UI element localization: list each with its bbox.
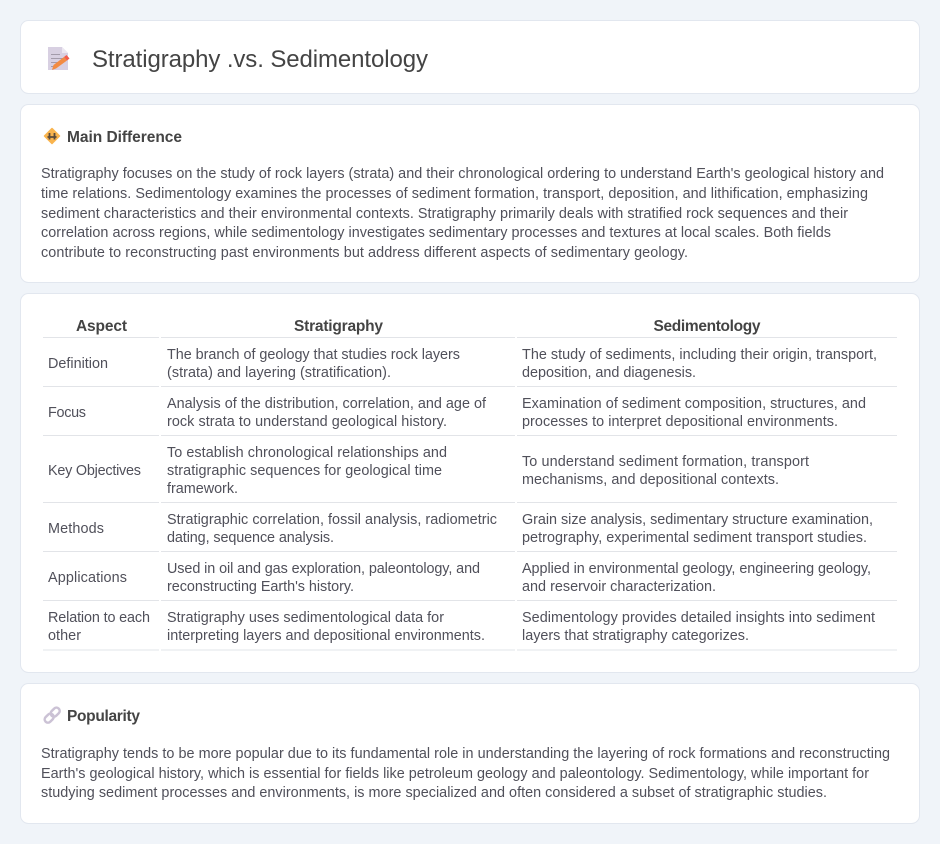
text block: main difference paragraph: Stratigraphy focuses on the study of rock layers (strata) and their chronological ordering to understand Earth's geological history and: [41, 166, 884, 182]
table row: applications: Applications: [48, 570, 127, 586]
icon: link: [43, 706, 61, 724]
table row: key objectives: mechanisms, and depositional contexts.: [522, 472, 779, 488]
table row: focus: Focus: [48, 405, 86, 421]
table row: applications: Used in oil and gas exploration, paleontology, and: [167, 561, 480, 577]
table header row: Stratigraphy: [294, 318, 383, 335]
table row: definition: The branch of geology that studies rock layers: [167, 347, 460, 363]
table row: methods: Methods: [48, 521, 104, 537]
text block: popularity paragraph: Earth's geological history, which is essential for fields like petroleum geology and paleontology. Sedimentology, while important for: [41, 766, 869, 782]
table row: key objectives: Key Objectives: [48, 463, 141, 479]
table row: methods: Stratigraphic correlation, fossil analysis, radiometric: [167, 512, 497, 528]
table row: focus: rock strata to understand geological history.: [167, 414, 447, 430]
panel: popularity: [20, 684, 920, 824]
table row: relation to each other: Sedimentology provides detailed insights into sediment: [522, 610, 875, 626]
text block: popularity paragraph: Stratigraphy tends to be more popular due to its fundamental role in understanding the layering of rock formations and reconstructing: [41, 746, 890, 762]
table header row: Aspect: [76, 318, 127, 335]
table row: relation to each other: layers that stratigraphy categorizes.: [522, 628, 749, 644]
table row: methods: dating, sequence analysis.: [167, 530, 334, 546]
text block: popularity paragraph: [41, 746, 890, 801]
table row: relation to each other: [43, 610, 897, 650]
icon: warning diamond: [44, 128, 60, 144]
table row: methods: Grain size analysis, sedimentary structure examination,: [522, 512, 873, 528]
heading: main difference: Main Difference: [67, 129, 182, 146]
text block: main difference paragraph: sediment characteristics and their environmental contexts. Stratigraphy primarily deals with stratified rock sequences and their: [41, 206, 848, 222]
panel: main difference: [20, 104, 920, 282]
table row: relation to each other: interpreting layers and depositional environments.: [167, 628, 485, 644]
table row: methods: petrography, experimental sediment transport studies.: [522, 530, 867, 546]
text block: main difference paragraph: correlation across regions, while sedimentology investigates sedimentary processes and textures at local scales. Both fields: [41, 225, 831, 241]
table row: focus: processes to interpret depositional environments.: [522, 414, 838, 430]
panel: page header: [20, 20, 920, 94]
table header row: Sedimentology: [654, 318, 761, 335]
table row: definition: (strata) and layering (stratification).: [167, 365, 391, 381]
table row: applications: Applied in environmental geology, engineering geology,: [522, 561, 871, 577]
table row: methods: [43, 512, 897, 552]
table row: definition: deposition, and diagenesis.: [522, 365, 696, 381]
table row: key objectives: stratigraphic sequences for geological time: [167, 463, 442, 479]
table row: focus: Examination of sediment composition, structures, and: [522, 396, 866, 412]
table row: key objectives: To understand sediment formation, transport: [522, 454, 809, 470]
text block: main difference paragraph: time relations. Sedimentology examines the processes of sediment formation, transport, deposition, and lithification, emphasizing: [41, 186, 868, 202]
table row: focus: Analysis of the distribution, correlation, and age of: [167, 396, 487, 412]
table row: definition: Definition: [48, 356, 108, 372]
table row: relation to each other: Stratigraphy uses sedimentological data for: [167, 610, 444, 626]
table row: definition: The study of sediments, including their origin, transport,: [522, 347, 877, 363]
panel: comparison table: [20, 294, 920, 672]
table row: key objectives: [43, 445, 897, 503]
table header row: [43, 318, 897, 338]
heading: popularity: Popularity: [67, 708, 140, 725]
text block: main difference paragraph: contribute to reconstructing past environments but address different aspects of sedimentary geology.: [41, 245, 688, 261]
table row: applications: reconstructing Earth's history.: [167, 579, 354, 595]
table row: key objectives: To establish chronological relationships and: [167, 445, 447, 461]
table row: relation to each other: Relation to each: [48, 610, 150, 626]
table row: focus: [43, 396, 897, 436]
table row: definition: [43, 347, 897, 387]
table row: key objectives: framework.: [167, 481, 238, 497]
table row: relation to each other: other: [48, 628, 81, 644]
table row: applications: [43, 561, 897, 601]
text block: popularity paragraph: studying sediment processes and environments, is more specialized and often considered a subset of stratigraphic studies.: [41, 785, 827, 801]
icon: document with pencil: [48, 47, 70, 70]
title: Stratigraphy .vs. Sedimentology: [92, 46, 428, 73]
text block: main difference paragraph: [41, 166, 884, 261]
table row: applications: and reservoir characterization.: [522, 579, 716, 595]
